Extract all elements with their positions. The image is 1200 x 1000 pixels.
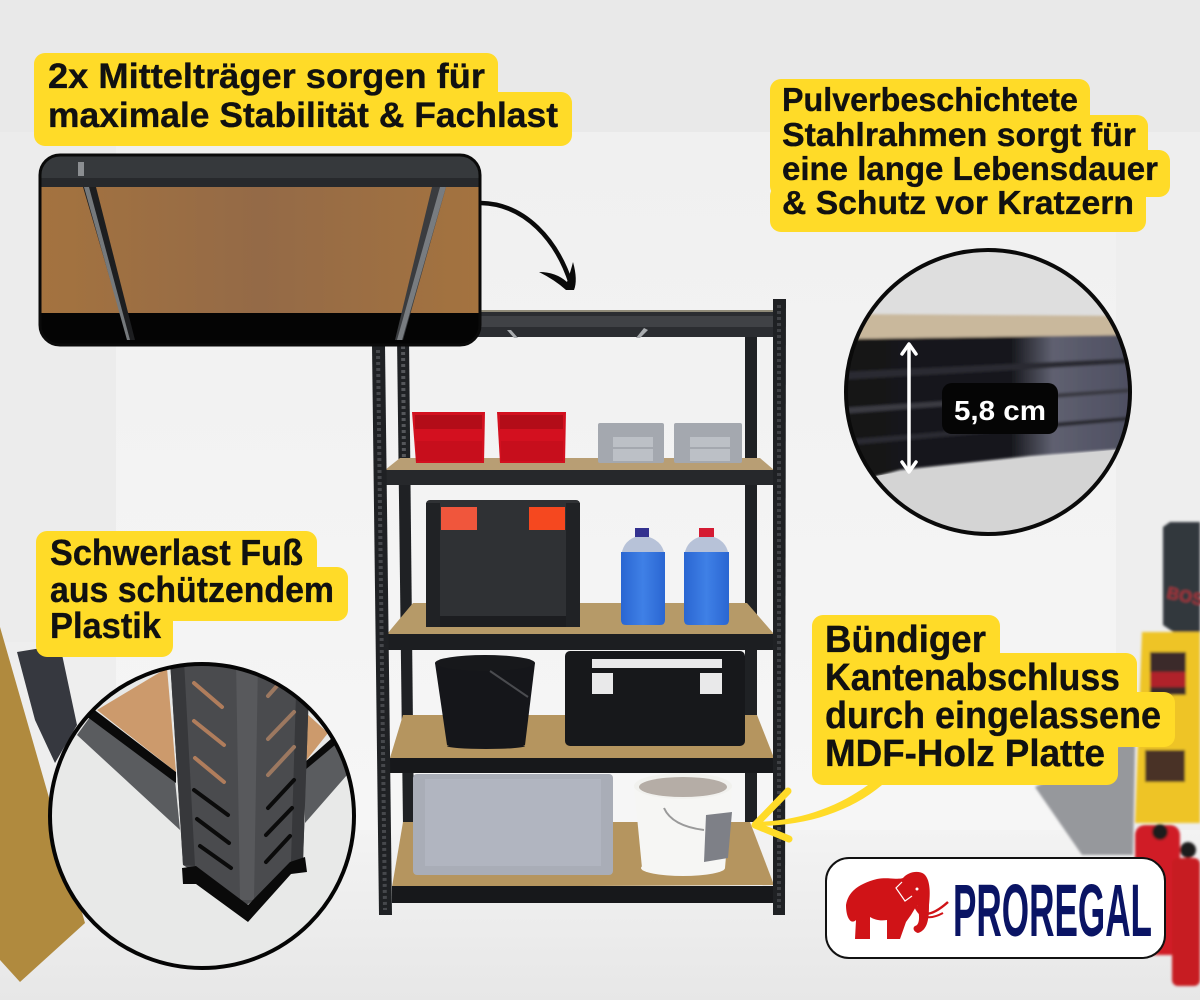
callout text: Plastik xyxy=(50,605,162,646)
dimension label xyxy=(942,383,1058,434)
callout text: durch eingelassene xyxy=(825,695,1161,737)
callout: flush edge xyxy=(812,615,1175,785)
arrow: callout to shelf edge xyxy=(755,785,882,839)
callout text: eine lange Lebensdauer xyxy=(782,150,1158,187)
callout text: Stahlrahmen sorgt für xyxy=(782,116,1136,153)
right side props: case, crates, canisters xyxy=(1035,522,1200,986)
bottom shelf xyxy=(392,822,774,903)
grey storage box xyxy=(413,774,613,875)
fourth shelf xyxy=(390,715,775,773)
front right upright xyxy=(773,299,786,915)
second shelf xyxy=(385,458,775,485)
blue canisters xyxy=(621,528,729,625)
arrow: photo to shelf xyxy=(481,203,576,290)
callout text: & Schutz vor Kratzern xyxy=(782,184,1134,221)
grey boxes xyxy=(598,423,742,463)
canister right xyxy=(684,528,729,625)
callout: foot xyxy=(36,531,348,657)
top shelf xyxy=(383,310,775,338)
photo border xyxy=(40,155,480,345)
callout text: MDF-Holz Platte xyxy=(825,733,1105,775)
heading text xyxy=(48,57,558,135)
callout text: Pulverbeschichtete xyxy=(782,81,1078,118)
dark panel leaning on left wall xyxy=(17,645,77,763)
logo: Proregal xyxy=(826,858,1165,958)
cardboard panel leaning on left wall xyxy=(0,627,85,982)
callout text: aus schützendem xyxy=(50,569,334,610)
callout text xyxy=(825,619,1161,775)
callout highlight xyxy=(770,79,1170,232)
black toolcase xyxy=(426,500,580,627)
circle: foot detail xyxy=(45,660,360,975)
callout text: Kantenabschluss xyxy=(825,657,1120,699)
shelf unit xyxy=(372,299,786,915)
icon: red mammoth xyxy=(846,872,948,939)
third shelf xyxy=(387,603,775,650)
callout text: Bündiger xyxy=(825,619,986,661)
dimension arrow xyxy=(902,344,916,472)
heading text: maximale Stabilität & Fachlast xyxy=(48,96,558,135)
red bins xyxy=(412,412,566,463)
callout highlight xyxy=(812,615,1175,785)
back uprights xyxy=(397,337,757,825)
black bucket xyxy=(435,655,535,749)
heading highlight xyxy=(34,53,572,146)
callout highlight xyxy=(36,531,348,657)
circle: frame edge detail xyxy=(840,250,1135,540)
black toolbox xyxy=(565,651,745,746)
photo: underside of shelf xyxy=(40,155,480,345)
dimension label: 5,8 cm xyxy=(954,395,1046,426)
canister left xyxy=(621,528,665,625)
callout text xyxy=(50,532,334,646)
callout text: Schwerlast Fuß xyxy=(50,532,303,573)
heading text: 2x Mittelträger sorgen für xyxy=(48,57,485,96)
callout: centre supports xyxy=(34,53,572,146)
front left upright xyxy=(372,345,392,915)
callout text xyxy=(782,81,1158,221)
callout: powder coating xyxy=(770,79,1170,232)
white paint bucket xyxy=(634,773,732,876)
